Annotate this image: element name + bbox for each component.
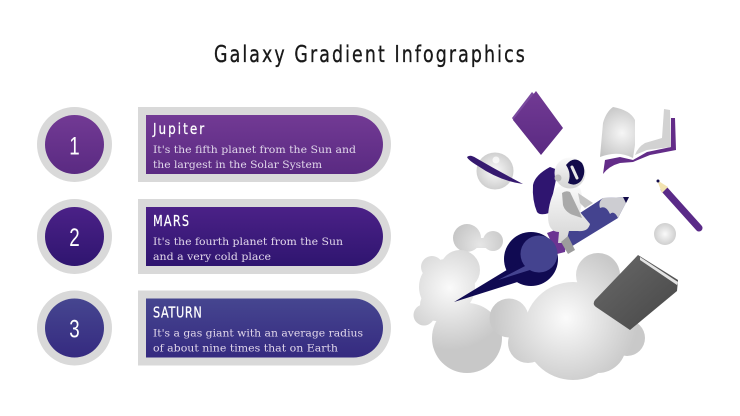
number badge 2: 2	[69, 223, 80, 252]
icon: rocket pencil	[454, 197, 629, 302]
title: Galaxy Gradient Infographics	[214, 40, 525, 68]
panel: Mars	[138, 199, 391, 274]
text: Saturn description: It's a gas giant with an average radius	[153, 328, 363, 340]
number badge 1: 1	[69, 132, 80, 160]
icon: grey book	[594, 255, 678, 330]
icon: back cloud	[453, 224, 503, 252]
row 2: Mars	[37, 199, 391, 274]
icon: small pencil	[656, 180, 699, 228]
text: Mars description: It's the fourth planet from the Sun	[153, 236, 343, 248]
number badge 2	[37, 199, 112, 274]
icon: open book	[600, 107, 676, 174]
icon: purple book	[512, 91, 563, 155]
heading: Saturn: SATURN	[153, 305, 202, 322]
panel: Jupiter	[138, 107, 391, 182]
text: Jupiter description: the largest in the Solar System	[153, 159, 322, 171]
text: Jupiter description: It's the fifth planet from the Sun and	[153, 144, 356, 156]
icon: right cloud	[490, 253, 645, 380]
icon: small planet	[654, 223, 676, 245]
icon: left cloud	[414, 250, 502, 373]
number badge 1	[37, 107, 112, 182]
icon: ringed planet	[467, 152, 523, 190]
text: Saturn description: of about nine times that on Earth	[153, 342, 338, 354]
heading: Mars: MARS	[153, 214, 189, 231]
icon: astronaut	[533, 158, 593, 254]
number badge 3	[37, 290, 112, 366]
heading: Jupiter: Jupiter	[152, 121, 205, 138]
row 3: Saturn	[37, 290, 391, 366]
panel: Saturn	[138, 290, 391, 366]
text: Mars description: and a very cold place	[153, 251, 271, 263]
number badge 3: 3	[69, 315, 80, 343]
row 1: Jupiter	[37, 107, 391, 182]
illustration: astronaut riding a pencil among clouds	[414, 91, 699, 380]
